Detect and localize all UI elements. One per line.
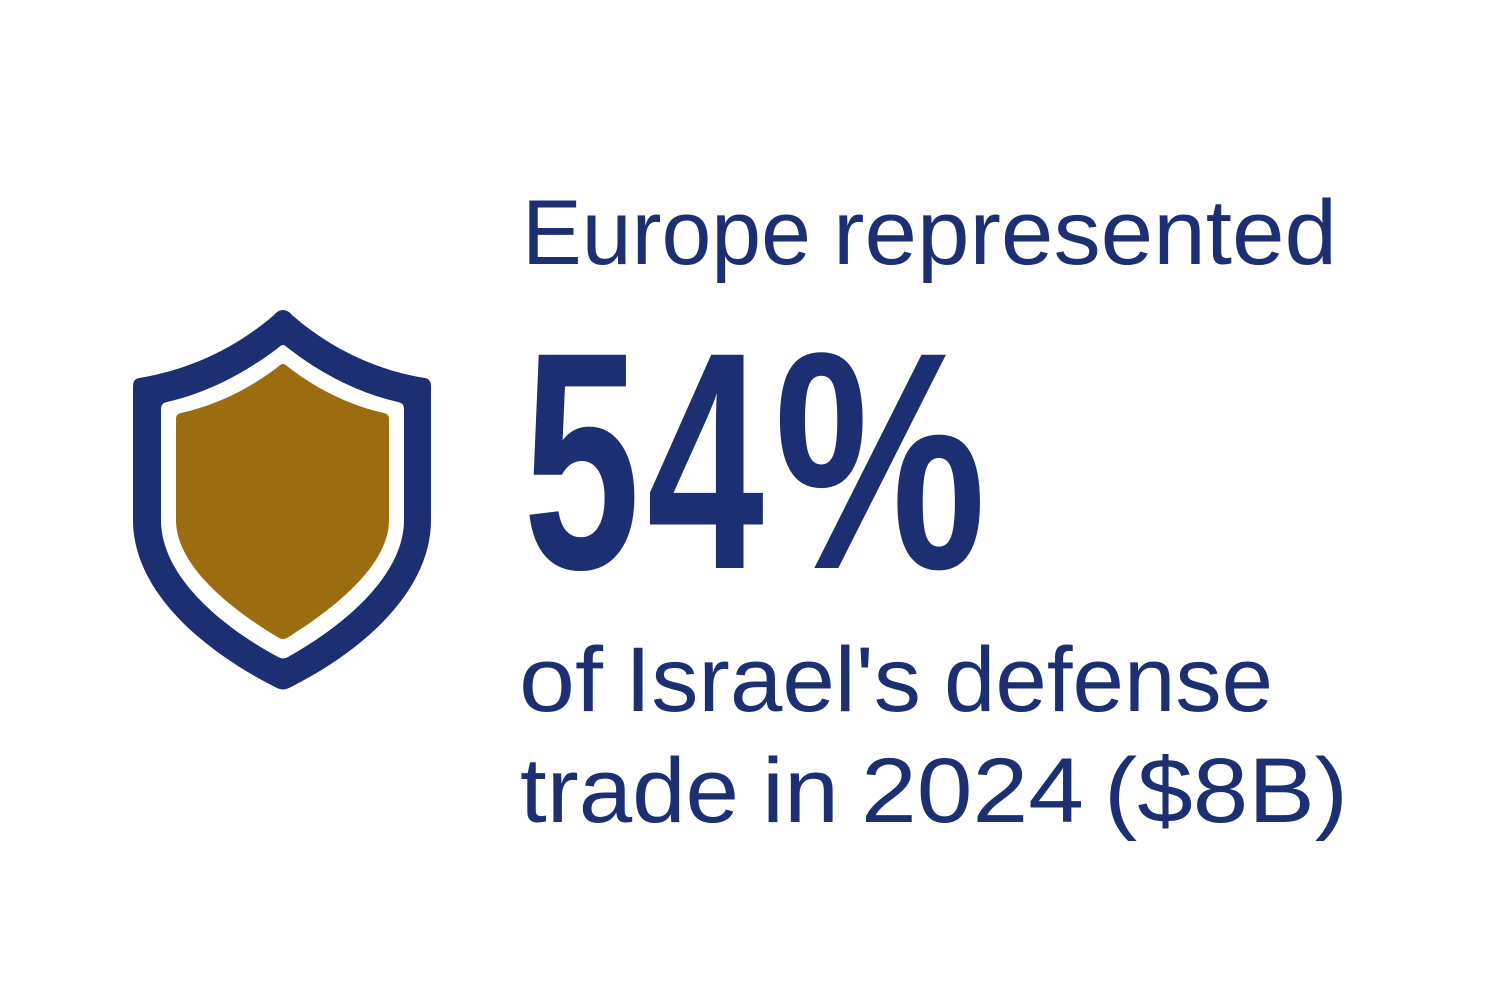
text: of Israel's defense: Israel's — [625, 629, 921, 731]
text: of Israel's defense: defense — [944, 629, 1273, 731]
text: trade in 2024 ($8B): trade — [520, 740, 739, 842]
big number: 54%: % — [774, 288, 986, 634]
text: trade in 2024 ($8B): ($8B) — [1104, 740, 1348, 842]
text: Europe represented: represented — [833, 182, 1337, 284]
text: trade in 2024 ($8B): in — [762, 740, 839, 842]
big number: 54% — [523, 288, 986, 635]
text: of Israel's defense: of — [519, 629, 603, 731]
text: trade in 2024 ($8B): 2024 — [861, 740, 1084, 842]
big number: 54%: 54 — [523, 289, 765, 635]
icon: shield — [133, 310, 431, 690]
text: Europe represented: Europe — [522, 182, 811, 284]
